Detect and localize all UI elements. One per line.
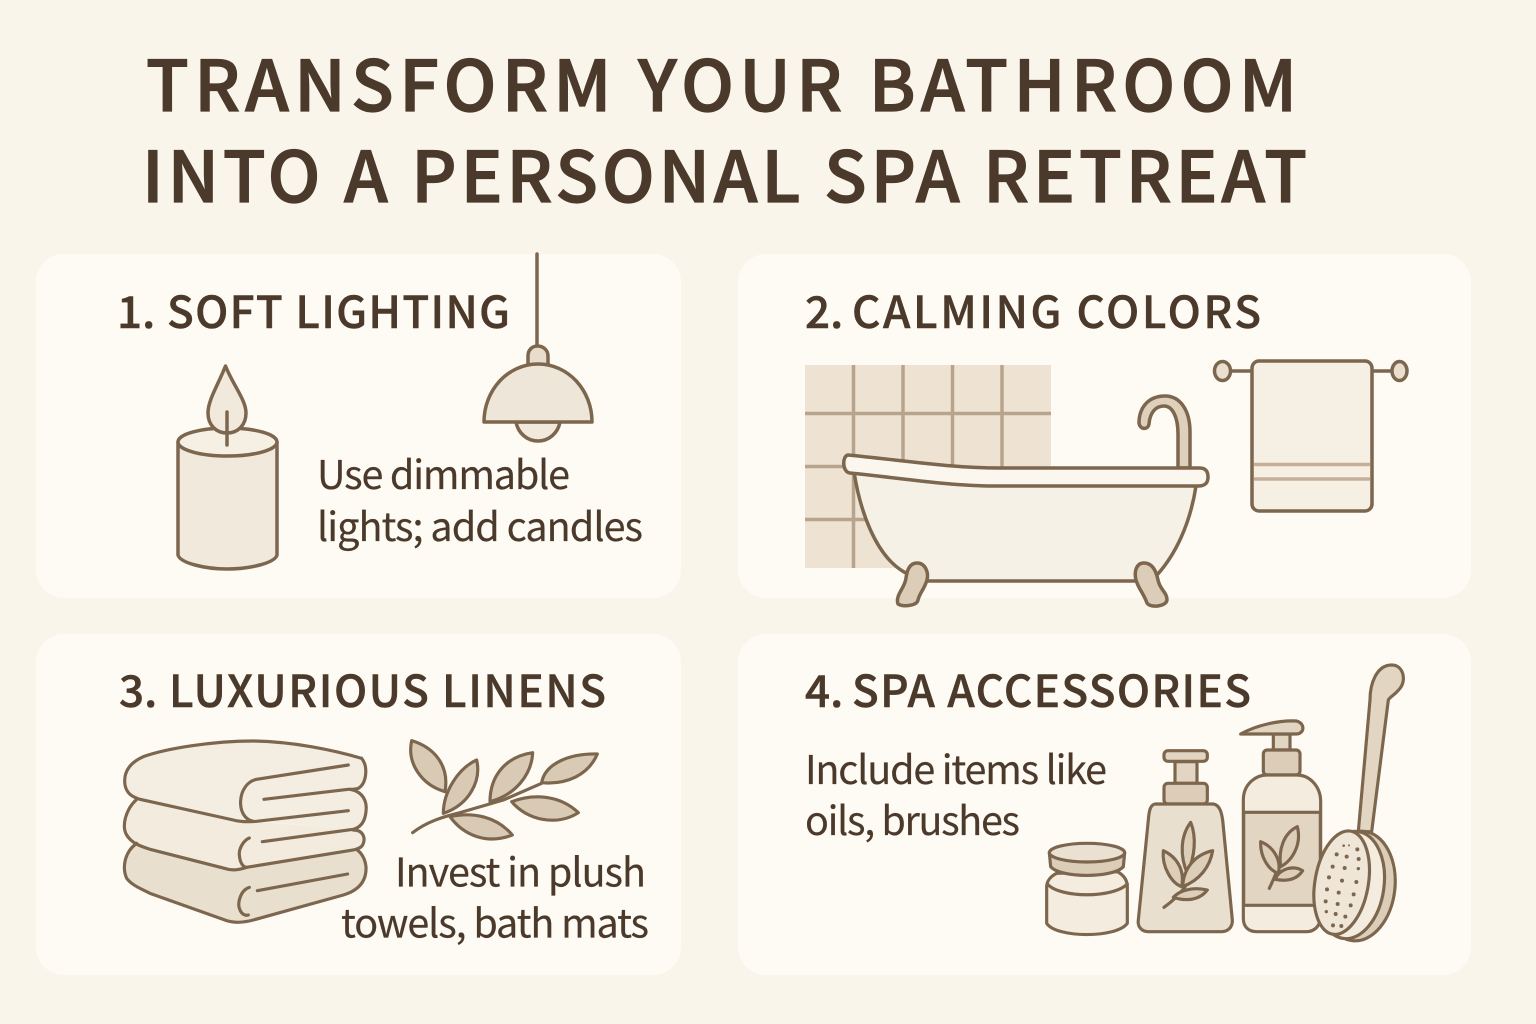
- icon: hanging towel: [1214, 361, 1407, 511]
- heading: soft lighting: SOFT LIGHTING: [167, 277, 510, 341]
- heading: calming colors: 2.: [805, 277, 843, 341]
- heading: luxurious linens: LUXURIOUS LINENS: [169, 656, 606, 720]
- icon: folded towels: [124, 741, 366, 922]
- title: [142, 31, 1307, 223]
- icon: candle: [178, 366, 277, 569]
- body text: soft lighting: Use dimmable: [317, 444, 570, 501]
- title: TRANSFORM YOUR BATHROOM: [146, 31, 1297, 132]
- heading: calming colors: CALMING COLORS: [852, 277, 1261, 341]
- tile wall: [805, 365, 1051, 568]
- body text: spa accessories: oils, brushes: [805, 790, 1020, 847]
- icon: pendant lamp: [484, 254, 592, 441]
- heading: spa accessories: 4.: [805, 656, 843, 720]
- panel: spa accessories: [738, 634, 1471, 975]
- body text: soft lighting: lights; add candles: [317, 496, 643, 553]
- body text: luxurious linens: Invest in plush: [395, 842, 646, 898]
- body text: spa accessories: Include items like: [805, 739, 1107, 796]
- heading: luxurious linens: 3.: [119, 656, 157, 720]
- body text: soft lighting: [317, 444, 643, 553]
- panel: soft lighting: [36, 254, 681, 598]
- icon: bath brush: [1306, 665, 1403, 945]
- icon: leaf branch: [411, 741, 597, 839]
- icon: cream jar: [1047, 843, 1127, 935]
- heading: soft lighting: 1.: [117, 277, 155, 341]
- icon: pump bottle: [1241, 721, 1321, 932]
- body text: luxurious linens: towels, bath mats: [341, 892, 649, 950]
- icon: leaf bottle: [1138, 751, 1232, 932]
- body text: luxurious linens: [341, 842, 649, 950]
- title: INTO A PERSONAL SPA RETREAT: [142, 122, 1307, 223]
- body text: spa accessories: [805, 739, 1107, 847]
- panel: luxurious linens: [36, 634, 681, 975]
- icon: clawfoot bathtub: [844, 396, 1208, 606]
- panel: calming colors: [738, 254, 1471, 606]
- heading: spa accessories: SPA ACCESSORIES: [852, 656, 1251, 720]
